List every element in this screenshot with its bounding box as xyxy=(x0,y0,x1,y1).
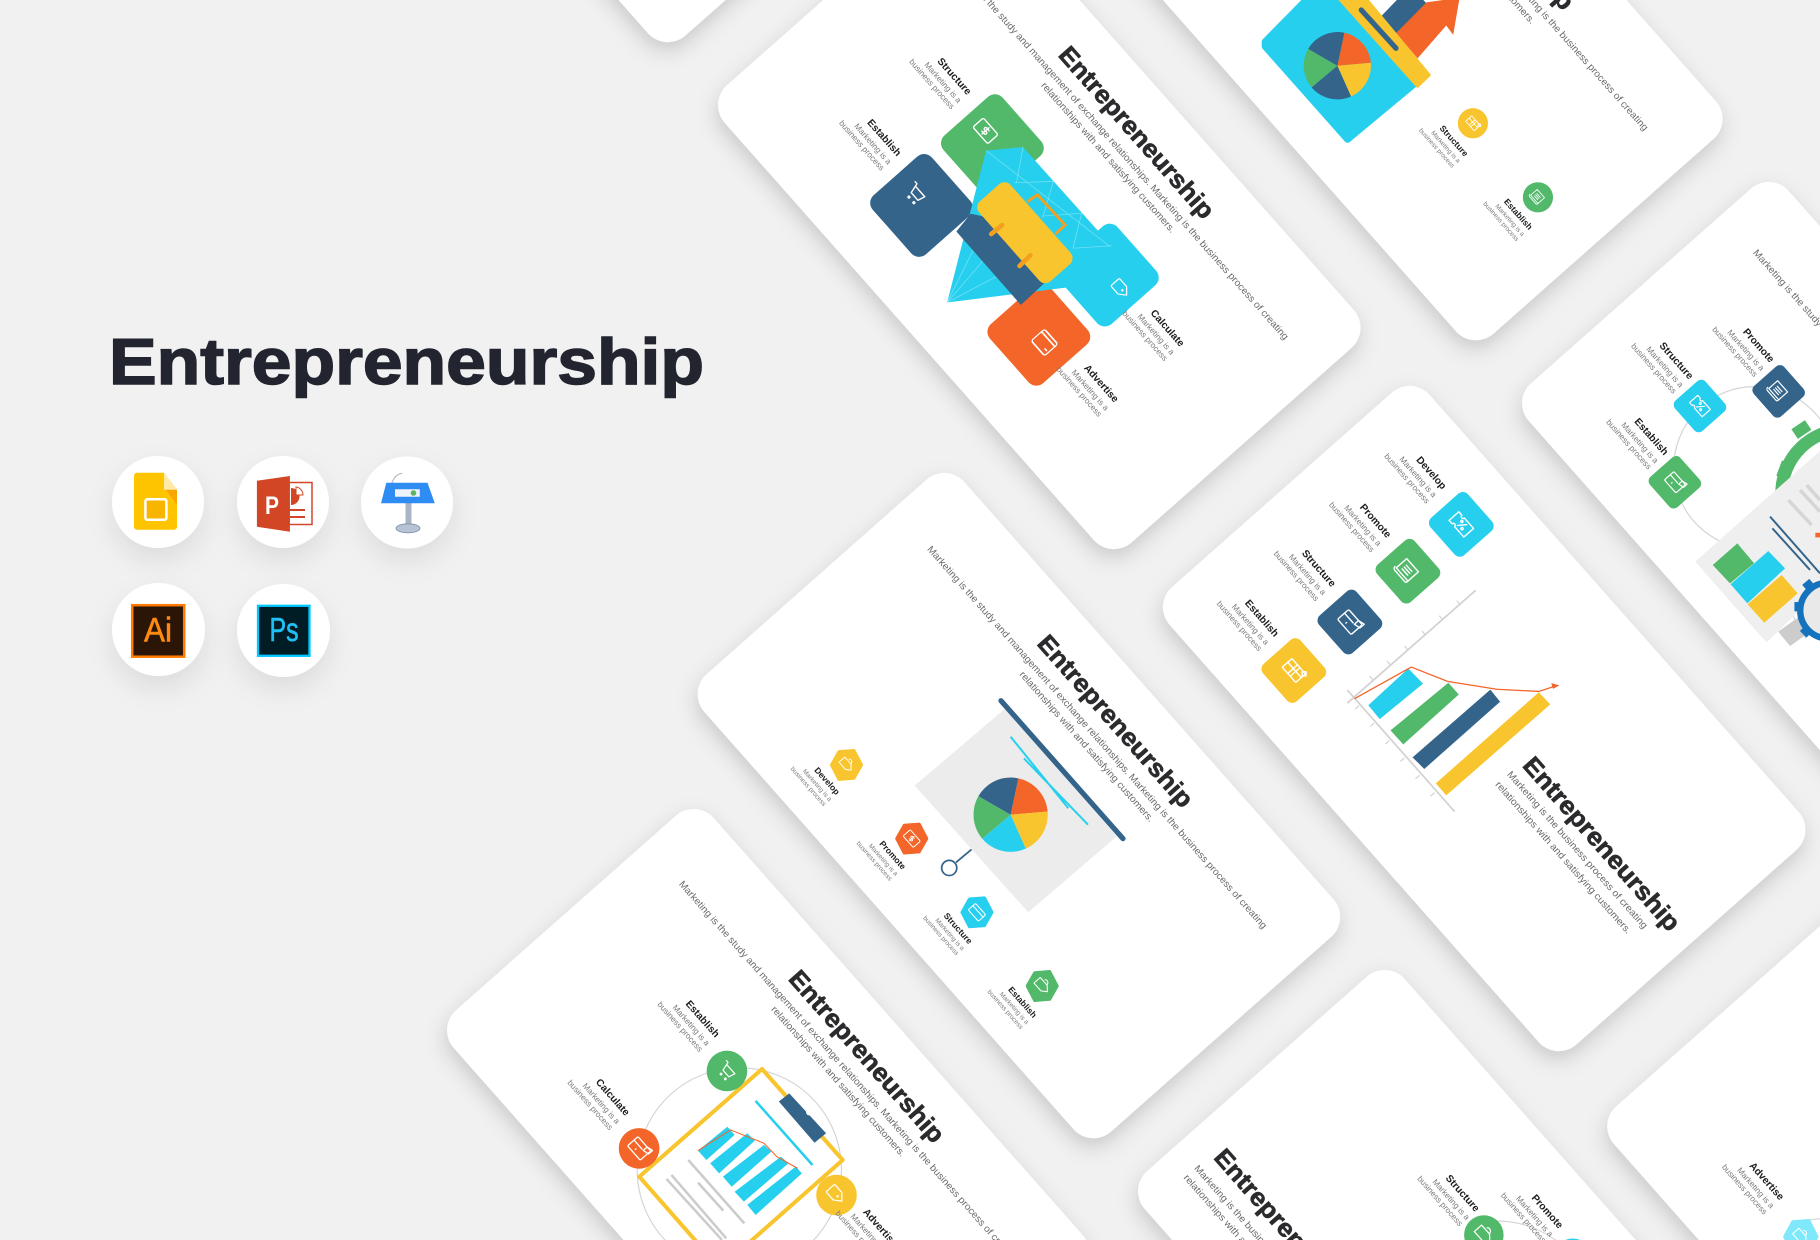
icon badge: structure xyxy=(1458,108,1488,138)
hexagon: advertise xyxy=(1785,1220,1817,1240)
icon badge: advertise xyxy=(816,1175,857,1215)
tile: structure xyxy=(1315,587,1385,657)
label: structure: Structure xyxy=(935,56,973,98)
label: structure: Marketing is a xyxy=(1431,1177,1472,1222)
tile: establish xyxy=(866,150,977,261)
bar chart xyxy=(698,1127,802,1215)
stand xyxy=(1778,600,1820,646)
label: structure xyxy=(1417,114,1471,170)
label: structure xyxy=(1272,535,1338,603)
label: advertise xyxy=(1055,350,1121,419)
label: promote: Marketing is a xyxy=(1342,504,1383,548)
label: advertise: Advertise xyxy=(1747,1161,1786,1203)
label: calculate: Calculate xyxy=(1148,308,1186,349)
label: establish: Establish xyxy=(683,999,721,1040)
heading and description: relationships with and satisfying customers. xyxy=(768,1004,907,1159)
label: structure: business process xyxy=(907,57,956,111)
label: develop xyxy=(789,753,842,808)
software icons xyxy=(112,456,453,677)
ring arc xyxy=(1806,1219,1820,1221)
tile: promote xyxy=(1750,363,1807,420)
label: advertise xyxy=(1720,1148,1786,1217)
tile: develop xyxy=(1426,489,1497,560)
label: structure xyxy=(1629,327,1695,396)
label: promote xyxy=(1327,486,1393,554)
illustration: envelope and briefcase xyxy=(947,147,1112,304)
icon: PowerPoint xyxy=(237,456,329,548)
label: develop xyxy=(1382,437,1448,506)
icon: Photoshop: Ps xyxy=(270,611,298,648)
process ring xyxy=(1674,387,1820,549)
panel: slide with arrow and pie xyxy=(1069,0,1734,351)
blue gear xyxy=(1794,579,1820,638)
label: promote: Promote xyxy=(878,839,908,872)
label: promote: Marketing is a xyxy=(867,843,899,878)
label: calculate: business process xyxy=(1120,309,1169,363)
label: develop: Develop xyxy=(1413,455,1448,492)
label: calculate: business process xyxy=(566,1078,614,1132)
panel: slide with pie and hexagons xyxy=(687,462,1351,1149)
panel: slide with clipboard xyxy=(436,798,1101,1240)
heading and description: Entrepreneurship xyxy=(783,965,950,1149)
heading and description: Entrepreneurship xyxy=(1032,630,1199,813)
label: structure: Marketing is a xyxy=(1287,553,1328,597)
heading and description xyxy=(1493,749,1686,956)
tile: establish xyxy=(1646,454,1704,511)
label: structure: business process xyxy=(921,915,960,958)
icon: Google Slides xyxy=(112,456,204,548)
tile: establish xyxy=(1259,635,1329,706)
tile: calculate xyxy=(1052,219,1163,331)
label: establish: Marketing is a xyxy=(1619,421,1660,465)
label: establish: Establish xyxy=(1006,985,1039,1020)
cyan lines xyxy=(1011,737,1088,825)
label: promote: Marketing is a xyxy=(1725,328,1766,373)
icon: Keynote xyxy=(361,456,453,548)
icon: Illustrator xyxy=(112,583,205,676)
label: structure: Structure xyxy=(1438,123,1471,159)
label: establish: business process xyxy=(1215,599,1264,653)
icon: Illustrator: Ai xyxy=(144,612,172,650)
label: promote: business process xyxy=(1327,500,1376,554)
label: promote xyxy=(1710,310,1776,379)
ring xyxy=(637,1068,842,1240)
label: advertise xyxy=(834,1194,900,1240)
clipboard xyxy=(639,1069,843,1240)
label: develop: Marketing is a xyxy=(801,768,833,803)
label: promote: Promote xyxy=(1529,1193,1565,1231)
label: develop: Marketing is a xyxy=(1397,455,1438,500)
panel: clipped top slide xyxy=(261,0,925,53)
label: calculate: Marketing is a xyxy=(1135,312,1176,357)
label: structure: business process xyxy=(1415,1174,1464,1228)
label: structure: Structure xyxy=(1443,1173,1481,1215)
heading and description: Marketing is the study and management of exchange relationships. Marketing is the business process of creating xyxy=(676,879,1021,1240)
bar chart xyxy=(1347,590,1559,812)
heading and description: relationships with and satisfying customers. xyxy=(1493,780,1633,936)
label: calculate xyxy=(566,1063,632,1132)
label: promote: business process xyxy=(1710,325,1759,379)
tile: advertise xyxy=(983,279,1095,390)
label: structure: Marketing is a xyxy=(922,60,963,105)
label: establish: Marketing is a xyxy=(1230,602,1271,647)
label: advertise: business process xyxy=(1055,365,1103,419)
label: calculate: Marketing is a xyxy=(581,1081,622,1126)
tile: structure xyxy=(937,90,1048,201)
label: develop: business process xyxy=(1382,452,1431,505)
heading and description: Entrepreneurship xyxy=(1053,41,1220,225)
label: structure: Marketing is a xyxy=(933,917,966,952)
label: establish: business process xyxy=(1481,201,1520,243)
label: structure: business process xyxy=(1417,127,1456,170)
label: establish xyxy=(1481,188,1535,243)
label: structure xyxy=(907,43,973,111)
trend lines xyxy=(1770,517,1820,573)
hexagon: structure xyxy=(962,898,992,927)
label: promote: Promote xyxy=(1740,327,1776,365)
icon: Photoshop xyxy=(237,584,330,677)
ring arc xyxy=(1497,1221,1561,1240)
icon badge: establish xyxy=(707,1051,747,1091)
label: calculate: Calculate xyxy=(593,1077,631,1119)
heading and description: relationships with and satisfying customers. xyxy=(1017,669,1156,825)
label: establish xyxy=(986,976,1039,1031)
label: promote xyxy=(1499,1176,1565,1240)
label: structure: Structure xyxy=(942,911,975,946)
label: advertise: business process xyxy=(1720,1163,1769,1216)
hexagon: establish xyxy=(1027,972,1057,1001)
label: structure: Structure xyxy=(1657,341,1695,382)
label: promote: Marketing is a xyxy=(1514,1194,1555,1239)
label: establish: Marketing is a xyxy=(852,122,893,167)
label: promote: business process xyxy=(855,840,894,883)
label: establish: Establish xyxy=(1632,416,1670,458)
screen panel xyxy=(1698,451,1820,640)
pie chart xyxy=(973,778,1048,852)
label: advertise: Advertise xyxy=(1081,363,1120,405)
hexagon: develop xyxy=(831,750,862,779)
grey screen xyxy=(915,708,1117,912)
label: establish: business process xyxy=(1604,418,1653,471)
label: structure xyxy=(1415,1159,1481,1228)
label: structure: Marketing is a xyxy=(1429,130,1461,165)
panel: slide with briefcase xyxy=(707,0,1372,560)
bars xyxy=(1713,543,1798,623)
heading and description: Entrepreneurship xyxy=(1517,751,1686,937)
label: calculate xyxy=(1120,294,1186,363)
illustration: cyan tablet xyxy=(1265,0,1423,139)
lower ring arc xyxy=(1787,604,1806,638)
tile: structure xyxy=(1671,377,1729,435)
label: promote xyxy=(855,827,909,883)
label: establish: Establish xyxy=(865,118,903,159)
cover title: Entrepreneurship xyxy=(109,326,704,398)
label: develop: Develop xyxy=(812,765,842,797)
heading and description: relationships with and satisfying customers. xyxy=(1038,80,1177,235)
label: structure: Structure xyxy=(1299,548,1338,590)
orange mark xyxy=(1815,533,1820,537)
label: promote: Promote xyxy=(1357,502,1393,541)
heading and description: Marketing is the business process of creating xyxy=(1504,769,1649,931)
hexagon: promote xyxy=(897,824,927,853)
icon badge: establish xyxy=(1523,182,1553,212)
label: establish: Marketing is a xyxy=(671,1003,712,1048)
green gear xyxy=(1776,420,1820,557)
label: establish: Establish xyxy=(1242,598,1280,639)
pie chart xyxy=(1304,32,1371,99)
label: establish: Marketing is a xyxy=(1494,203,1526,238)
icon badge: promote xyxy=(1553,1238,1592,1240)
label: establish xyxy=(1215,584,1281,653)
arrow xyxy=(1378,0,1460,58)
icon badge: structure xyxy=(1464,1215,1504,1240)
label: establish: Marketing is a xyxy=(998,991,1030,1026)
panel: slide with gears xyxy=(1511,171,1820,858)
heading and description: Marketing is the study and management of exchange relationships. Marketing is the business process of creating xyxy=(924,544,1269,931)
panel: bottom right slide xyxy=(1596,894,1820,1240)
label: structure xyxy=(921,902,975,958)
label: establish xyxy=(837,104,903,173)
tile: promote xyxy=(1373,536,1443,606)
panel: slide with bar chart xyxy=(1152,375,1816,1062)
label: establish: business process xyxy=(986,989,1025,1031)
label: advertise: Marketing is a xyxy=(1735,1166,1776,1210)
icon badge: calculate xyxy=(619,1128,659,1169)
panel: bottom centre slide xyxy=(1127,959,1791,1240)
clip bar xyxy=(1335,0,1430,87)
label: establish: Establish xyxy=(1502,197,1535,232)
label: structure: business process xyxy=(1629,342,1678,395)
icon: PowerPoint: P xyxy=(265,492,279,520)
screen top bar xyxy=(1001,701,1123,839)
magnifier xyxy=(942,849,972,876)
label: establish: business process xyxy=(655,1000,704,1054)
label: establish: business process xyxy=(837,119,886,172)
label: establish xyxy=(655,985,721,1054)
label: develop: business process xyxy=(789,766,828,808)
label: establish xyxy=(1604,403,1670,472)
text lines xyxy=(1788,485,1820,525)
label: structure: business process xyxy=(1272,549,1321,603)
label: structure: Marketing is a xyxy=(1644,345,1685,390)
label: advertise: Marketing is a xyxy=(1070,368,1111,413)
